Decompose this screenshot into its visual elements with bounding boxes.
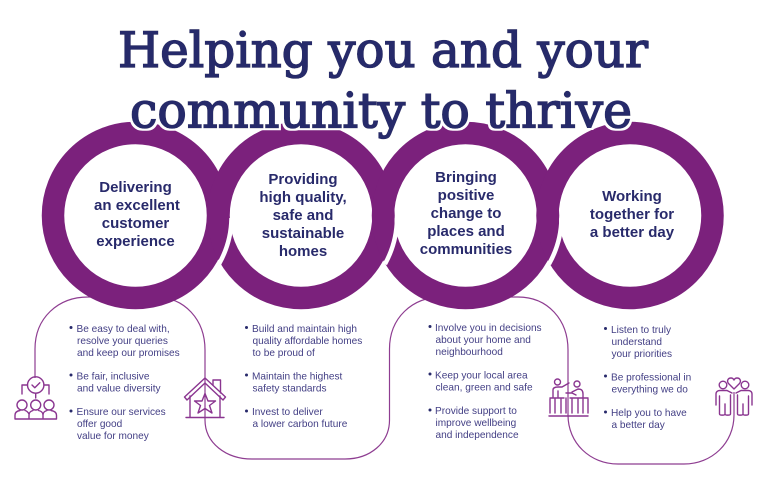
text block: customer experience bullets: Ensure our services (76, 407, 166, 418)
text block: homes bullets: quality affordable homes (252, 336, 362, 347)
heading: positive change: Bringing (435, 169, 497, 186)
text block: working together bullets: a better day (612, 420, 666, 431)
heading: positive change: change to (431, 205, 501, 222)
heading: excellent customer experience: Delivering (99, 179, 172, 196)
text block: customer experience bullets: and keep our promises (77, 348, 180, 359)
text block: working together bullets: Be professional in (611, 372, 691, 384)
heading: excellent customer experience: customer (102, 215, 169, 232)
text block: customer experience bullets: offer good (77, 419, 122, 430)
panel outlines: connecting line (35, 297, 734, 464)
text block: customer experience bullets: Be fair, inclusive (76, 372, 150, 382)
heading: working together: a better day (590, 224, 675, 241)
heading: working together: Working (602, 188, 662, 205)
title (118, 22, 649, 140)
heading: positive change: places and (427, 223, 505, 240)
text block: working together bullets: everything we do (612, 384, 688, 396)
heading: excellent customer experience: experience (96, 233, 175, 250)
text block: places and communities bullets: neighbourhood (436, 347, 503, 358)
heading: quality homes: sustainable (262, 225, 344, 242)
text block: working together bullets: your priorities (612, 349, 672, 360)
text block: homes bullets: to be proud of (252, 348, 315, 359)
text block: places and communities bullets: Involve you in decisions (435, 323, 542, 334)
text block: homes bullets: Maintain the highest (252, 372, 343, 382)
icon: two people and a heart (716, 378, 752, 415)
text block: places and communities bullets: Keep your local area (435, 370, 528, 382)
text block: homes bullets: safety standards (252, 384, 327, 394)
text block: places and communities bullets: improve wellbeing (436, 418, 516, 429)
heading: quality homes: Providing (268, 171, 338, 188)
text block: places and communities bullets: clean, green and safe (436, 382, 533, 394)
text block: customer experience bullets: resolve your queries (77, 336, 168, 347)
text block: places and communities bullets: Provide support to (435, 406, 517, 417)
text block: working together bullets: understand (612, 337, 662, 348)
text block: places and communities bullets: and independence (436, 430, 519, 441)
title: community to thrive (130, 82, 632, 140)
icon: neighbours at a fence (549, 379, 588, 416)
text block: customer experience bullets: Be easy to deal with, (76, 324, 170, 335)
icon: customers with check mark (15, 377, 56, 419)
heading: excellent customer experience: an excellent (94, 197, 180, 214)
heading: quality homes: homes (279, 243, 327, 260)
heading: working together: together for (590, 206, 674, 223)
text block: customer experience bullets (70, 324, 180, 442)
heading: positive change: positive (438, 187, 494, 204)
text block: homes bullets (245, 324, 362, 430)
text block: customer experience bullets: value for money (77, 431, 150, 442)
text block: places and communities bullets (428, 323, 542, 441)
text block: working together bullets: Help you to have (611, 408, 687, 419)
heading: quality homes: high quality, (259, 189, 347, 206)
rings: four linked circles (53, 133, 712, 298)
heading: quality homes: safe and (273, 207, 333, 224)
text block: homes bullets: Build and maintain high (252, 324, 357, 335)
text block: places and communities bullets: about your home and (436, 335, 531, 346)
text block: working together bullets: Listen to truly (611, 325, 672, 336)
text block: homes bullets: Invest to deliver (252, 407, 323, 418)
icon: house with star (184, 378, 226, 418)
title: Helping you and your (118, 22, 649, 79)
text block: customer experience bullets: and value diversity (77, 384, 162, 394)
text block: homes bullets: a lower carbon future (252, 419, 348, 430)
text block: working together bullets (604, 325, 691, 431)
heading: positive change: communities (420, 241, 512, 258)
